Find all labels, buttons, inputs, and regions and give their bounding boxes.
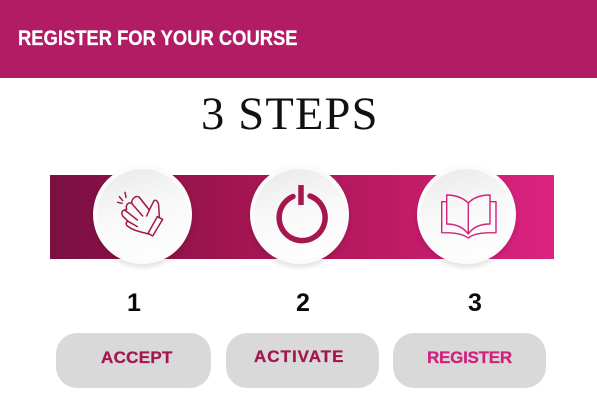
header banner (0, 0, 597, 78)
label: register: REGISTER (427, 348, 512, 367)
step 3 circle with book icon (417, 165, 516, 264)
step 1 circle with clap icon (93, 165, 192, 264)
label: accept: ACCEPT (101, 348, 173, 367)
step number 1: 1 (127, 289, 141, 317)
label: activate: ACTIVATE (254, 347, 344, 366)
gradient band (50, 175, 554, 259)
icon: clapping hands (116, 192, 164, 237)
button: accept (56, 333, 211, 388)
button: activate (226, 333, 379, 388)
icon: open book (441, 194, 497, 239)
button: register (393, 333, 546, 388)
step 2 circle with power icon (250, 165, 349, 264)
step number 3: 3 (468, 289, 482, 317)
step number 2: 2 (296, 289, 310, 317)
header title: REGISTER FOR YOUR COURSE (18, 26, 298, 50)
heading: 3 steps: 3 STEPS (201, 89, 379, 140)
icon: power symbol (276, 185, 328, 244)
